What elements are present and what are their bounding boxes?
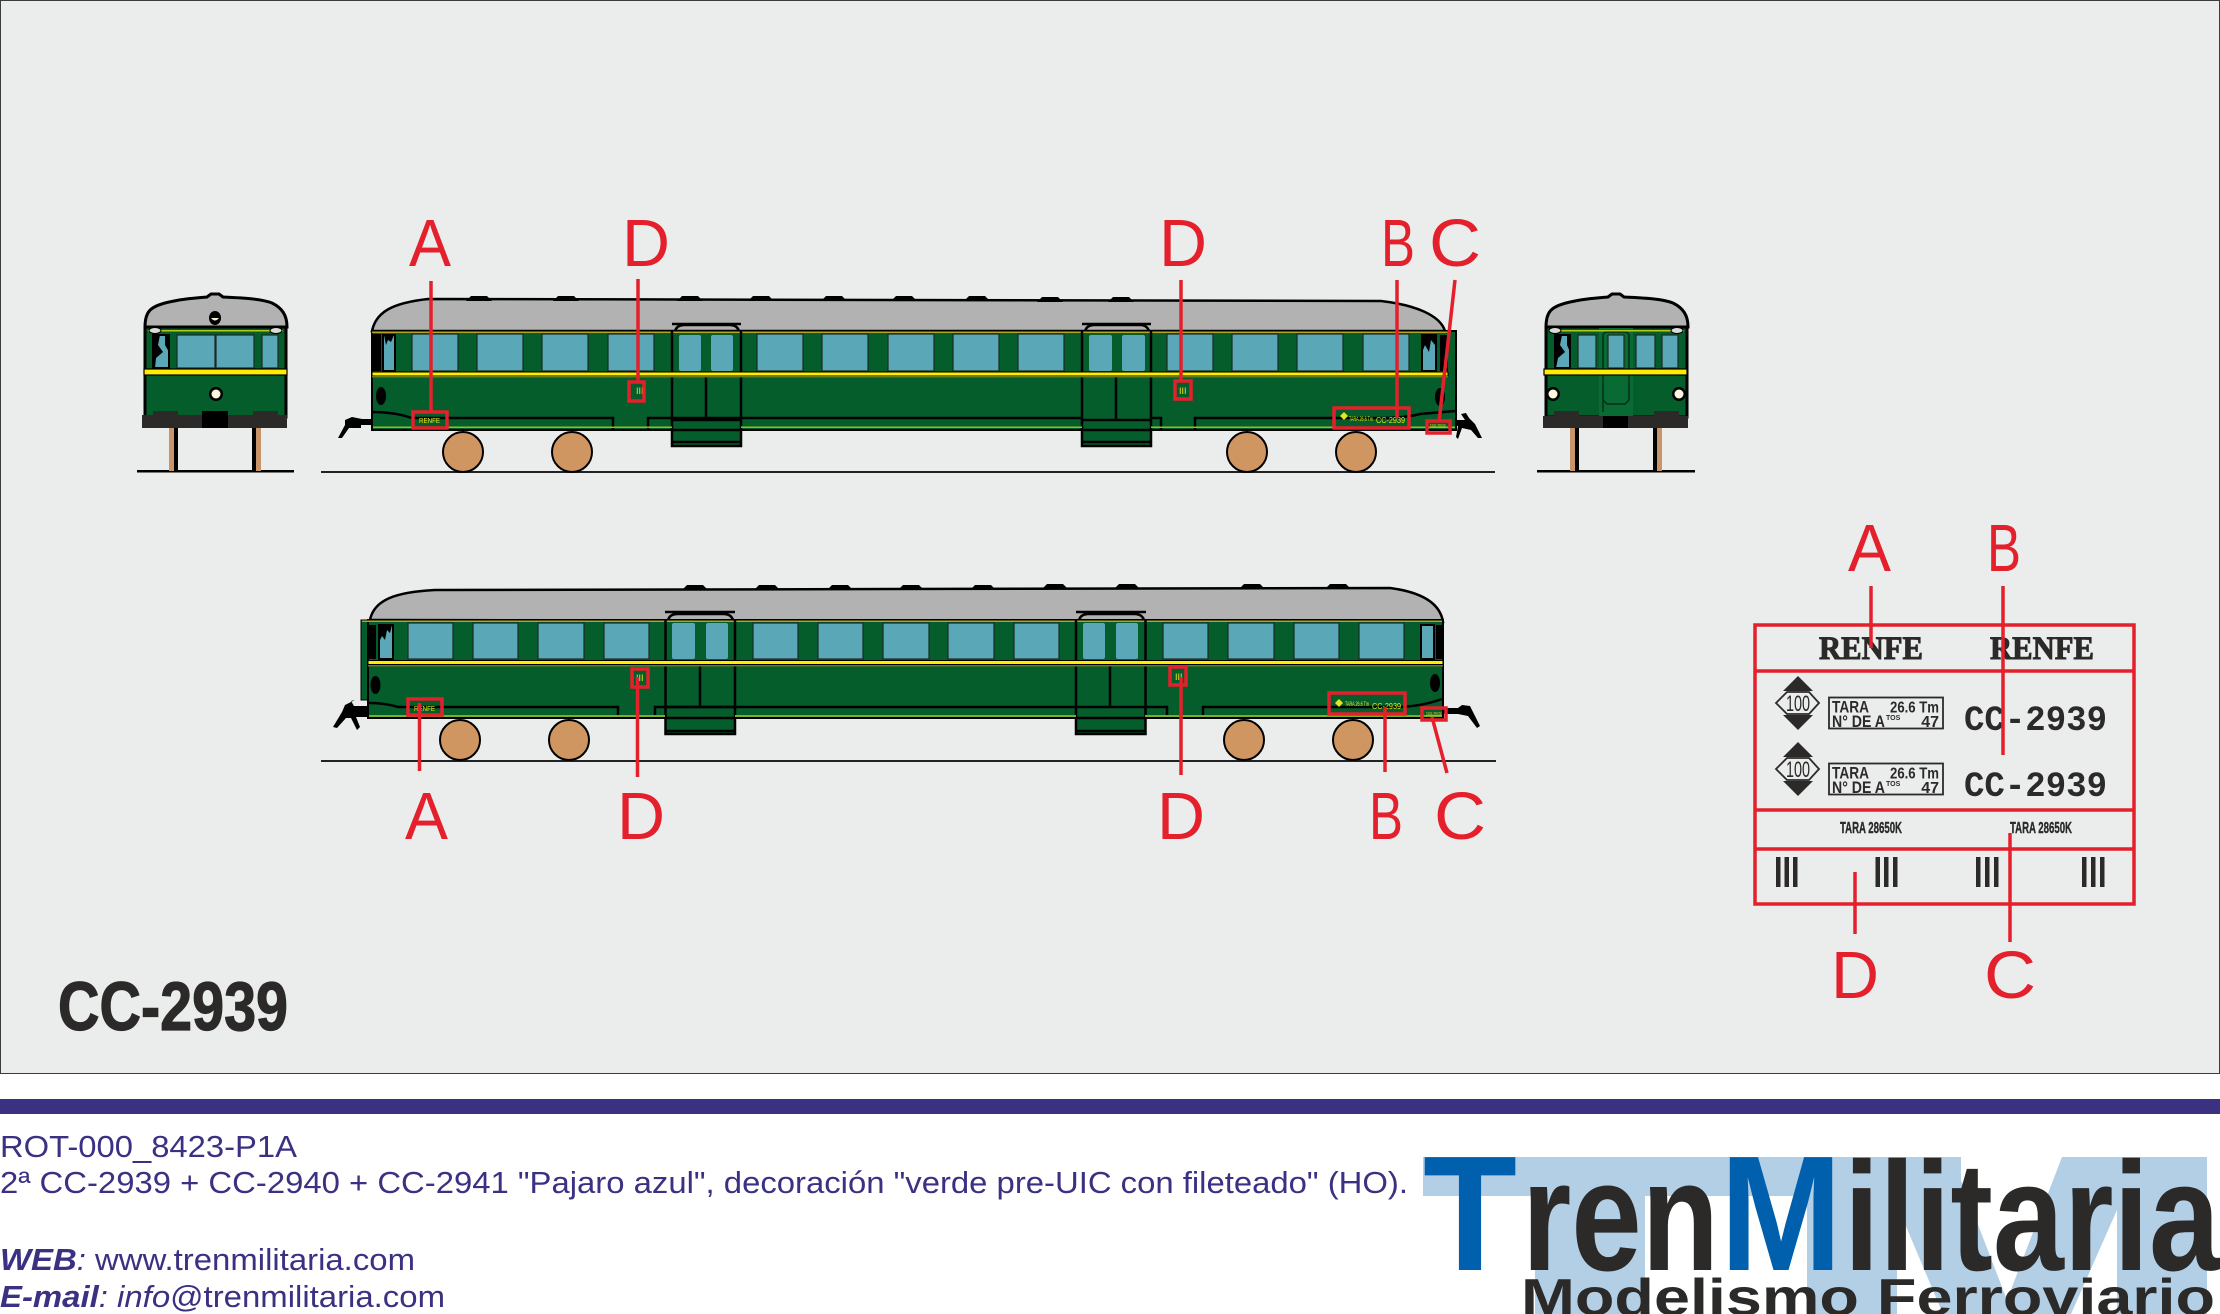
side lamps [370, 676, 380, 694]
yellow band [372, 372, 1448, 376]
ground line [321, 760, 1496, 762]
left end view of railcar [137, 294, 294, 472]
side lamps [376, 387, 386, 405]
speed diamond and tare plate, row 1 [1776, 676, 1943, 731]
body [361, 620, 369, 700]
callouts on top railcar [409, 206, 1481, 433]
logo wordmark: M [1720, 1122, 1842, 1305]
model number heading: CC-2939 [58, 968, 288, 1045]
yellow band [368, 660, 1443, 664]
decal callouts: A [1848, 511, 1891, 586]
top railcar side view: TARA 26.6 Tm [1349, 417, 1373, 423]
callouts on top railcar: A [409, 206, 451, 281]
footer divider bar [0, 1099, 2220, 1114]
windows [369, 623, 1442, 659]
callouts on top railcar: B [1381, 206, 1415, 281]
doors [665, 612, 1146, 734]
speed diamond and tare plate, row 1: N° DE A [1832, 712, 1885, 731]
footer text block: 2ª CC-2939 + CC-2940 + CC-2941 "Pajaro azul", decoración "verde pre-UIC con fileteado" (HO). [0, 1165, 1408, 1200]
speed diamond and tare plate, row 2 [1776, 742, 1943, 797]
panel: decal sheet [1755, 511, 2134, 1013]
top railcar side view: III [1179, 386, 1187, 396]
CC-2939 number, row 1: CC-2939 [1964, 701, 2107, 741]
callouts on bottom railcar: A [405, 779, 448, 854]
logo wordmark: T [1423, 1122, 1517, 1305]
callouts on bottom railcar: B [1369, 779, 1403, 854]
body [372, 331, 1456, 430]
footer text block: ROT-000_8423-P1A [0, 1129, 297, 1164]
callouts on top railcar: D [1159, 206, 1207, 281]
speed diamond and tare plate, row 1: TOS [1886, 715, 1901, 722]
RENFE decals [1819, 631, 2094, 667]
footer text block: WEB: www.trenmilitaria.com [0, 1242, 415, 1277]
decal callouts: B [1987, 511, 2021, 586]
speed diamond and tare plate, row 2: 26.6 Tm [1890, 766, 1939, 782]
top railcar side view [321, 296, 1495, 473]
speed diamond and tare plate, row 2: TOS [1886, 781, 1901, 788]
callouts on bottom railcar: D [1157, 779, 1205, 854]
decal callouts: C [1984, 938, 2036, 1013]
logo wordmark: ren [1522, 1129, 1719, 1304]
callouts on top railcar: D [622, 206, 670, 281]
roof vents [466, 296, 1134, 302]
decal callouts [1831, 511, 2036, 1013]
callouts on top railcar: C [1429, 206, 1481, 281]
doors [672, 324, 1151, 446]
decal sheet frame [1755, 625, 2134, 904]
ground line [321, 471, 1495, 473]
bottom railcar side view: CC-2939 [1372, 702, 1401, 711]
bottom railcar side view: III [1175, 672, 1183, 682]
callouts on bottom railcar: D [617, 779, 665, 854]
top railcar side view: TARA 28650K [1430, 424, 1446, 430]
footer text block: E-mail: info@trenmilitaria.com [0, 1279, 445, 1314]
speed diamond and tare plate, row 1: TARA [1832, 698, 1869, 716]
speed diamond and tare plate, row 2: 100 [1786, 757, 1810, 782]
tiny markings: RENFE [419, 418, 440, 425]
logo background TM shape [1423, 1157, 1961, 1314]
tiny markings: RENFE [414, 706, 435, 713]
footer text block [0, 1129, 1408, 1314]
right end view of railcar [1537, 294, 1695, 472]
triple bar decals [1776, 857, 2104, 887]
tare text decals: TARA 28650K [2010, 820, 2072, 837]
speed diamond and tare plate, row 1: 100 [1786, 691, 1810, 716]
callouts on bottom railcar: C [1434, 779, 1486, 854]
callouts on bottom railcar [405, 667, 1486, 854]
bottom railcar side view [321, 584, 1496, 762]
roof [372, 299, 1445, 331]
logo background M shape [1807, 1157, 2207, 1314]
couplers [338, 417, 372, 438]
bottom railcar side view: III [636, 673, 644, 683]
CC-2939 number, row 2: CC-2939 [1964, 767, 2107, 807]
tare text decals: TARA 28650K [1840, 820, 1902, 837]
top railcar side view: CC-2939 [1376, 416, 1405, 425]
speed diamond and tare plate, row 2: N° DE A [1832, 778, 1885, 797]
skirt lines [372, 411, 1455, 429]
skirt lines [369, 699, 1442, 717]
roof [370, 588, 1443, 622]
RENFE decals: RENFE [1819, 631, 1923, 667]
couplers [333, 700, 368, 730]
roof vents [682, 584, 1351, 590]
top railcar side view: III [636, 386, 644, 396]
logo: TrenMilitaria [1423, 1122, 2220, 1314]
tare text decals [1840, 820, 2072, 837]
bottom railcar side view: TARA 26.6 Tm [1345, 702, 1369, 708]
decal callouts: D [1831, 938, 1879, 1013]
wheels [440, 720, 1373, 760]
wheels [443, 432, 1376, 472]
speed diamond and tare plate, row 1: 47 [1921, 714, 1939, 731]
speed diamond and tare plate, row 2: TARA [1832, 764, 1869, 782]
windows [373, 334, 1448, 371]
speed diamond and tare plate, row 2: 47 [1921, 780, 1939, 797]
RENFE decals: RENFE [1990, 631, 2094, 667]
speed diamond and tare plate, row 1: 26.6 Tm [1890, 700, 1939, 716]
logo wordmark [1423, 1122, 2220, 1305]
bottom railcar side view: TARA 28650K [1426, 712, 1442, 718]
